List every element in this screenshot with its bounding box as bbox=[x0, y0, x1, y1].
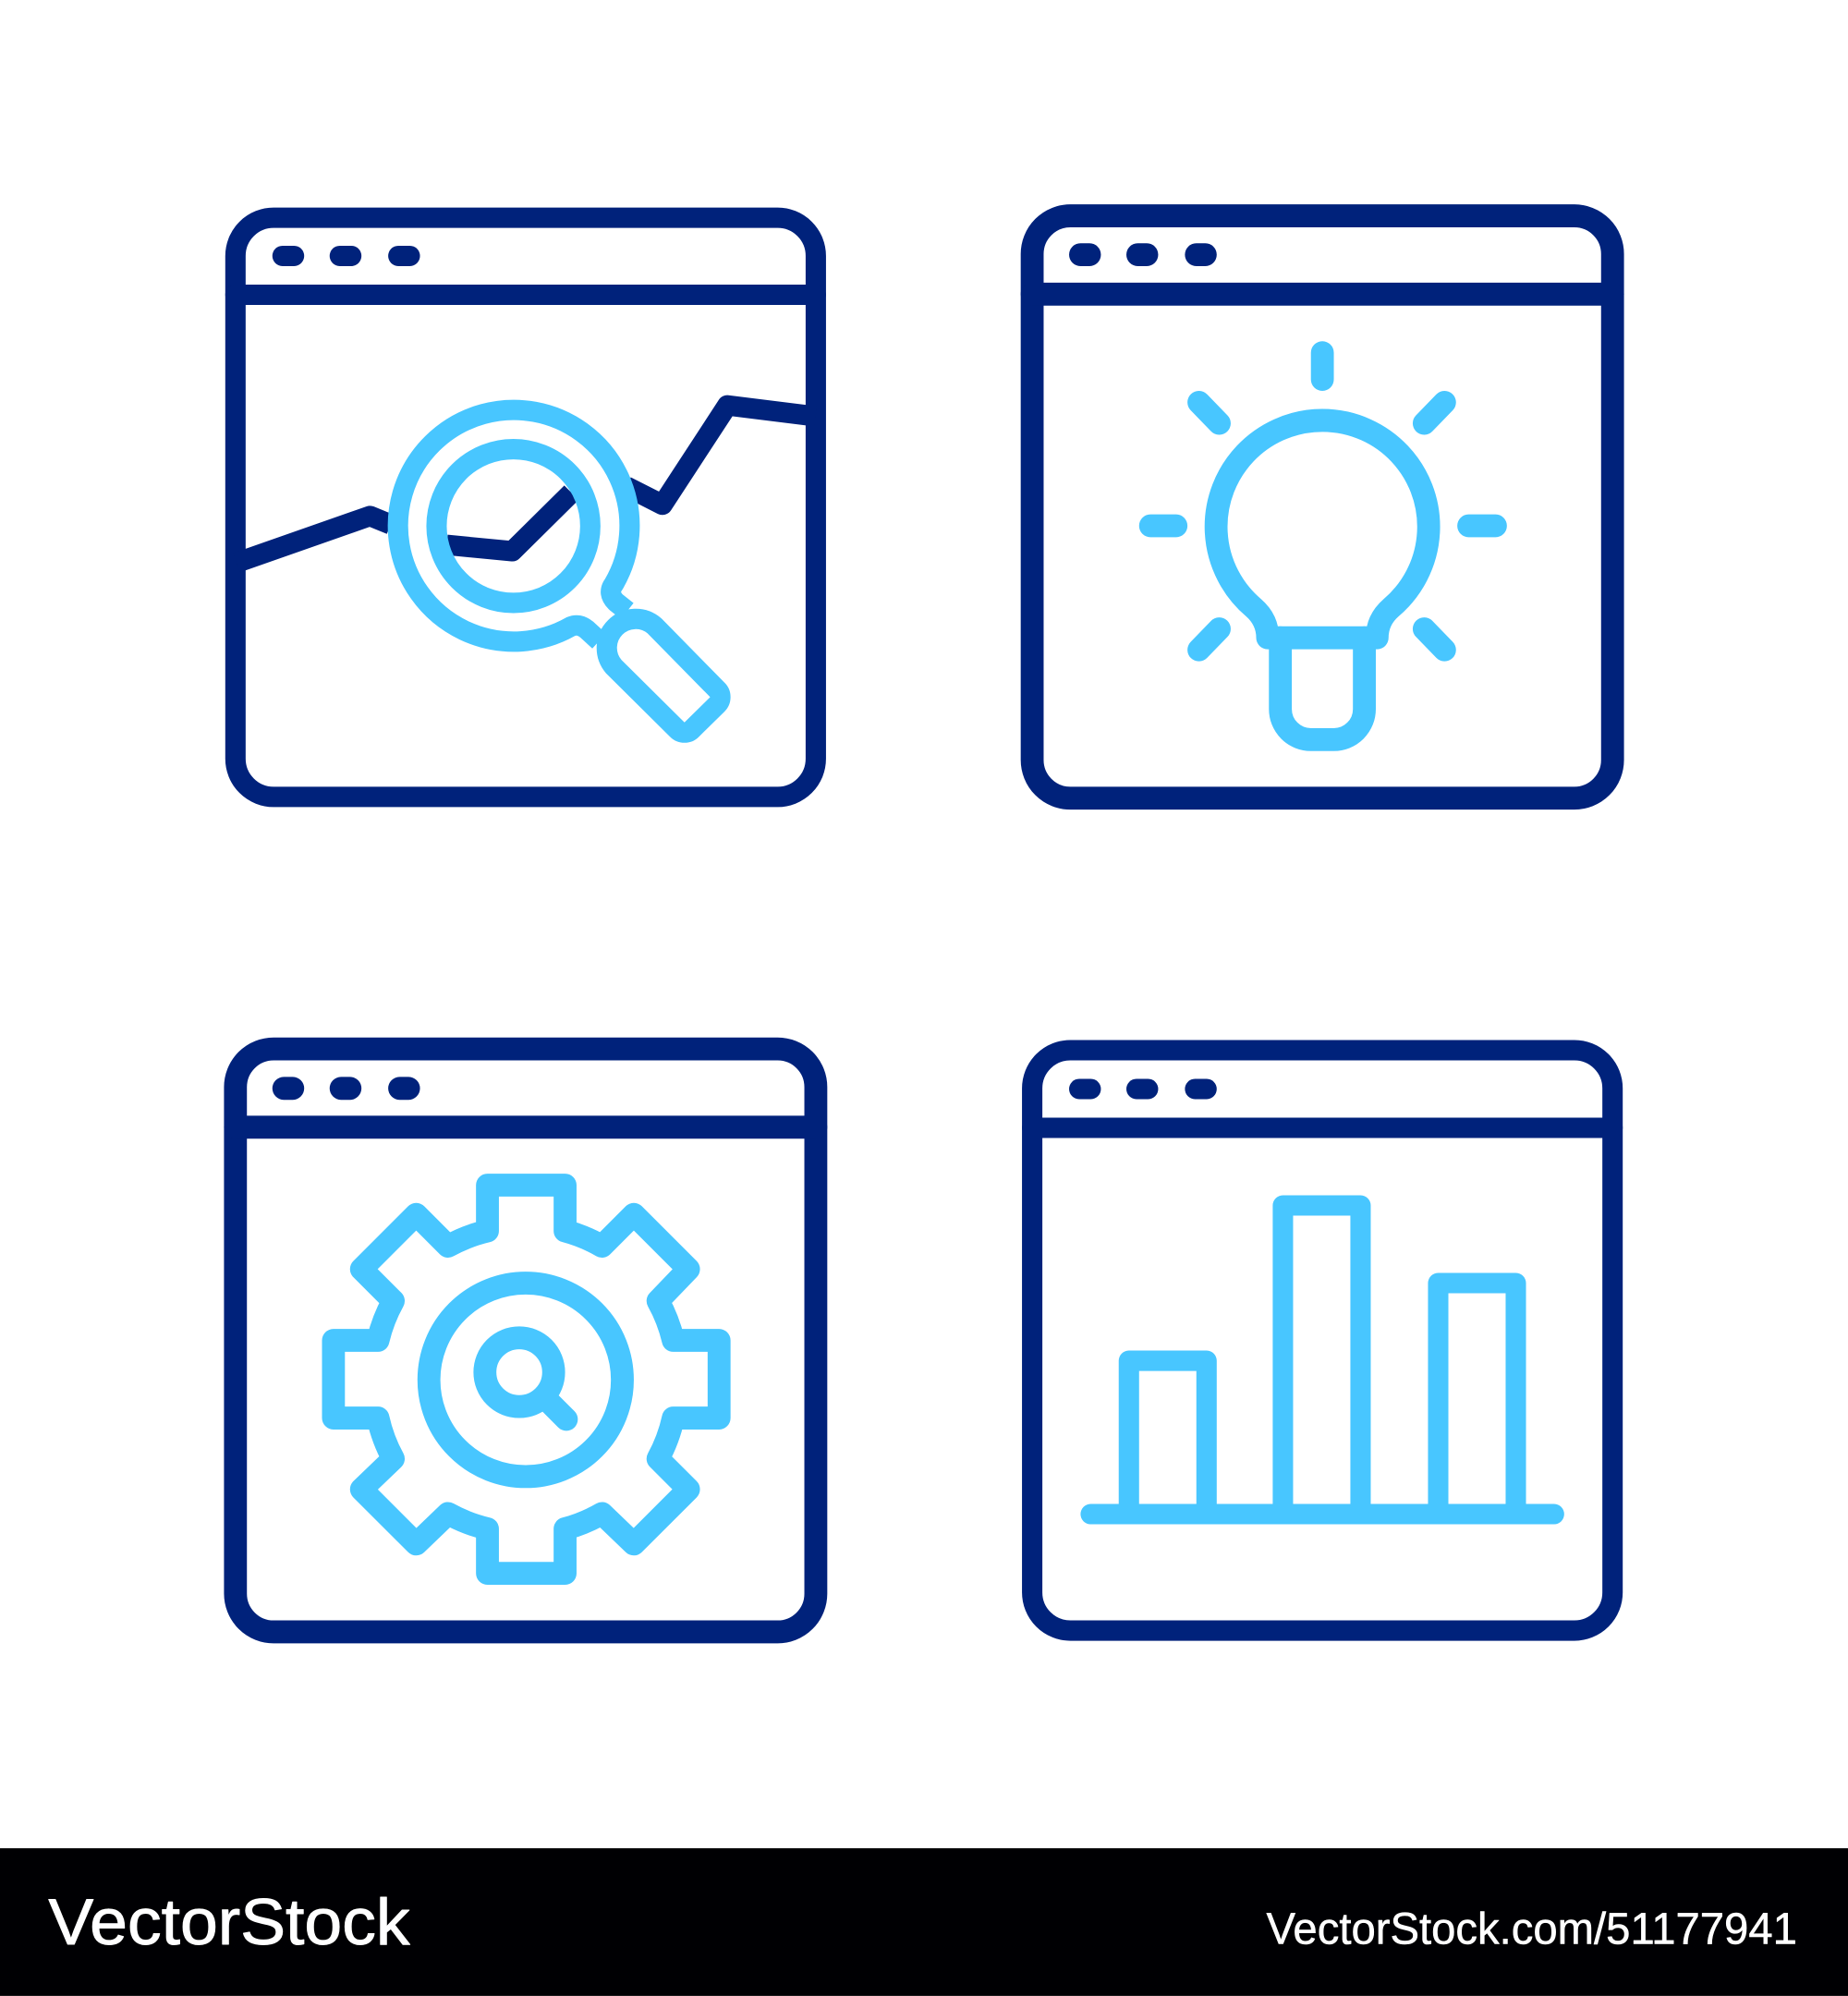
icon: gear with search bbox=[334, 1185, 719, 1574]
brand name: VectorStock bbox=[48, 1885, 410, 1958]
window frame bbox=[236, 1049, 816, 1632]
line chart bbox=[237, 406, 816, 563]
window header divider bbox=[1032, 1120, 1612, 1135]
window control dots bbox=[284, 1080, 408, 1097]
bar chart bbox=[1090, 1206, 1554, 1515]
window control dots bbox=[283, 249, 410, 263]
image id url: VectorStock.com/51177941 bbox=[1267, 1904, 1797, 1953]
icon: magnifying glass bbox=[398, 410, 721, 733]
window control dots bbox=[1080, 247, 1205, 263]
panel: browser window with bar chart bbox=[1032, 1050, 1612, 1631]
window frame bbox=[1032, 216, 1612, 798]
panel: browser window with magnifier over line chart bbox=[236, 218, 816, 797]
footer bar bbox=[0, 1848, 1848, 1996]
window frame bbox=[1032, 1050, 1612, 1631]
window control dots bbox=[1079, 1081, 1207, 1096]
window header divider bbox=[1032, 286, 1612, 302]
window header divider bbox=[236, 287, 816, 302]
window frame bbox=[236, 218, 816, 797]
panel: browser window with gear and magnifier bbox=[236, 1049, 816, 1632]
panel: browser window with light bulb bbox=[1032, 216, 1612, 798]
icon: light bulb bbox=[1150, 353, 1495, 739]
window header divider bbox=[236, 1119, 816, 1136]
